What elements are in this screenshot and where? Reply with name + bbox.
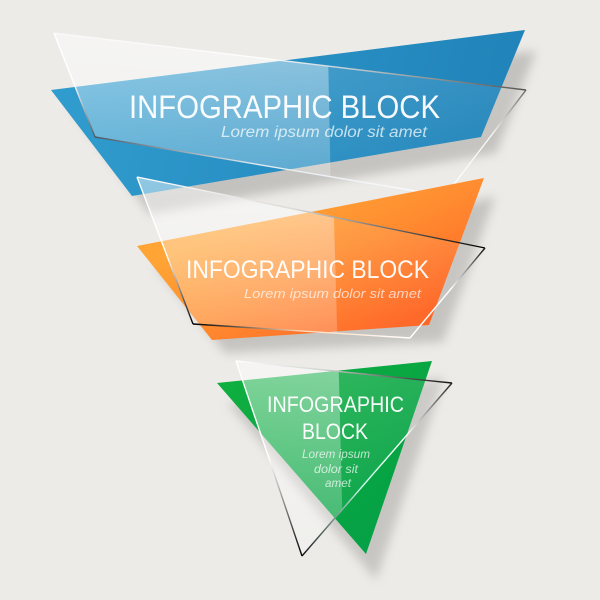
green subtitle: amet (325, 476, 352, 490)
green glass pane (236, 361, 452, 556)
green heading (267, 392, 404, 444)
panel: blue block (51, 30, 536, 214)
green shape (217, 361, 432, 554)
green heading: BLOCK (302, 419, 368, 444)
blue shape (51, 30, 525, 196)
blue shadow (70, 51, 536, 214)
blue subtitle: Lorem ipsum dolor sit amet (221, 124, 428, 141)
green shadow (228, 378, 444, 580)
orange shadow (155, 197, 495, 353)
green subtitle: dolor sit (314, 462, 359, 476)
green subtitle (302, 447, 370, 490)
orange glass pane (137, 177, 485, 338)
orange subtitle: Lorem ipsum dolor sit amet (244, 286, 423, 301)
panel: green block (217, 361, 452, 580)
blue heading: INFOGRAPHIC BLOCK (129, 89, 440, 125)
green heading: INFOGRAPHIC (267, 392, 404, 417)
panel: orange block (137, 177, 495, 353)
blue glass pane (54, 33, 526, 196)
orange shape (137, 178, 484, 340)
orange heading: INFOGRAPHIC BLOCK (186, 256, 429, 284)
green subtitle: Lorem ipsum (302, 447, 370, 461)
